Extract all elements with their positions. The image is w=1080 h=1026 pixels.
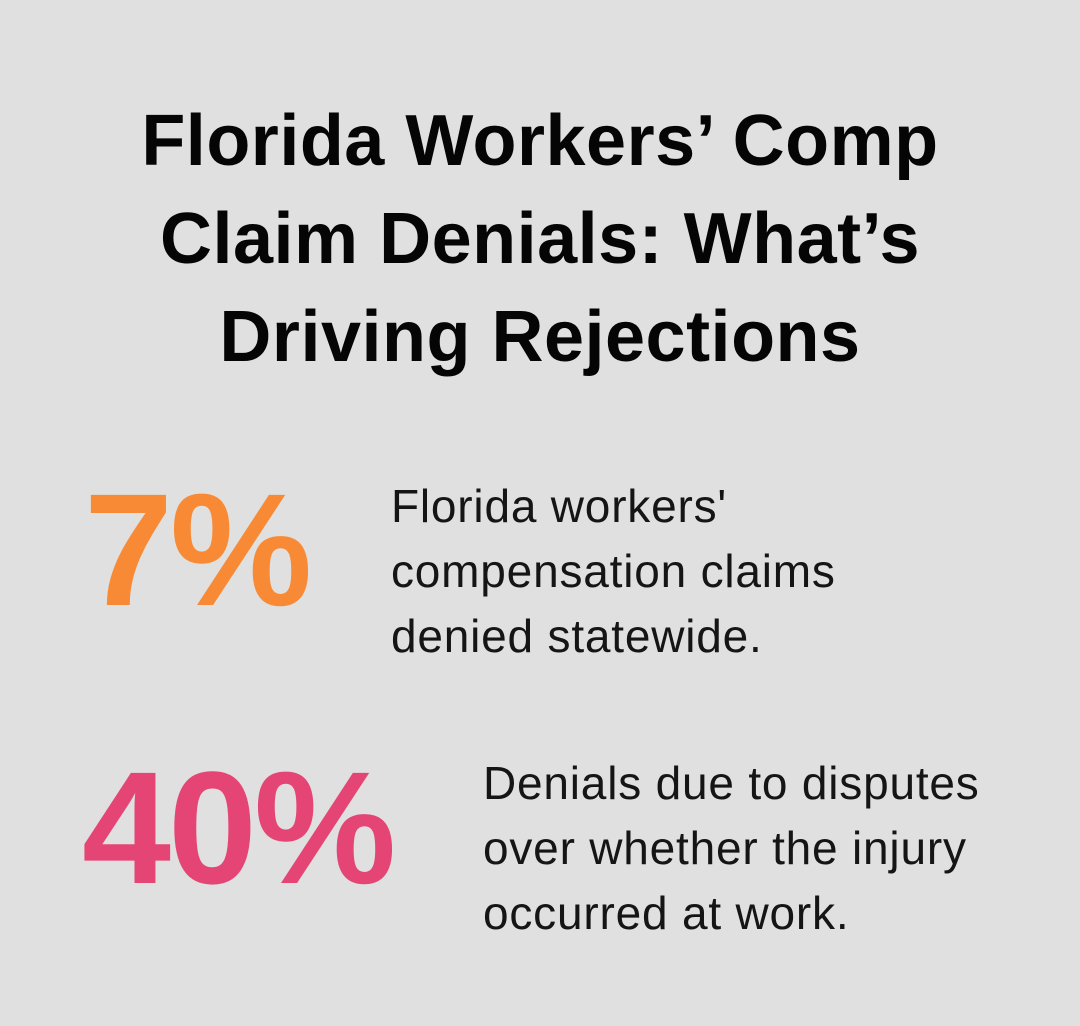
stat text 1: denied statewide. [391, 610, 763, 662]
stat text 2: occurred at work. [483, 887, 849, 939]
stat number 40%: 40% [82, 738, 393, 917]
title [141, 101, 939, 377]
title: Florida Workers’ Comp [141, 101, 939, 181]
stat text 2: over whether the injury [483, 822, 967, 874]
stat text 1: compensation claims [391, 545, 836, 597]
title: Driving Rejections [219, 297, 861, 377]
stat: 40% [82, 738, 980, 939]
stat number 7%: 7% [84, 460, 309, 639]
stat text 1 [391, 480, 836, 662]
stat text 1: Florida workers' [391, 480, 727, 532]
stat text 2 [483, 757, 980, 939]
title: Claim Denials: What’s [160, 199, 920, 279]
stat text 2: Denials due to disputes [483, 757, 980, 809]
stat: 7% [84, 460, 836, 662]
